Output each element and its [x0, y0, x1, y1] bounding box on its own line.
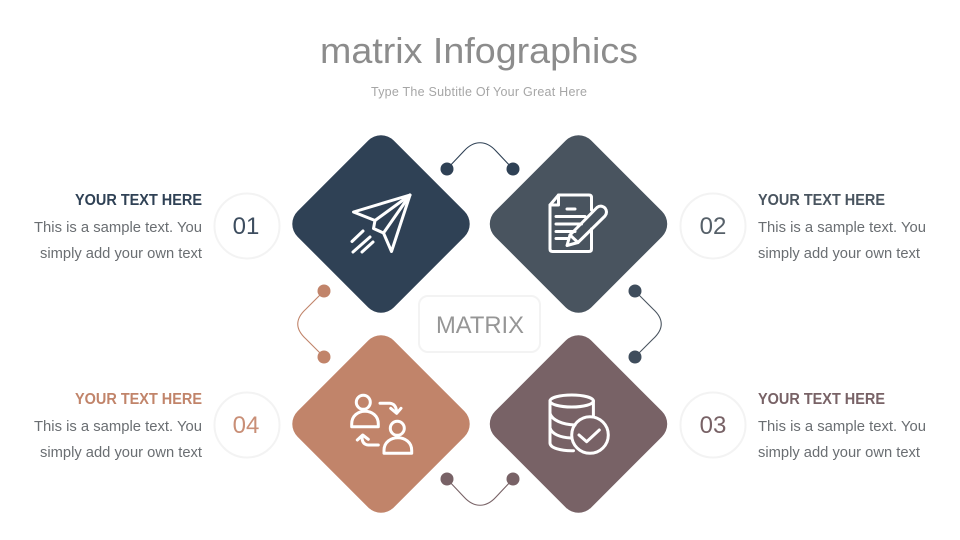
center label: MATRIX: MATRIX	[436, 312, 524, 339]
text block 01: simply add your own text	[40, 246, 202, 262]
icon: database with check	[550, 395, 608, 453]
title: matrix Infographics	[320, 30, 638, 71]
badge 04	[214, 392, 280, 458]
text block 04	[34, 391, 202, 461]
text block 02: This is a sample text. You	[758, 220, 926, 236]
connector: right	[628, 284, 661, 364]
diamond 04	[285, 328, 477, 520]
text block 04: This is a sample text. You	[34, 419, 202, 435]
badge 02: 02	[700, 213, 726, 240]
text block 03: This is a sample text. You	[758, 419, 926, 435]
diamond 03	[482, 328, 675, 520]
text block 04: simply add your own text	[40, 445, 202, 461]
text block 03	[758, 391, 926, 461]
text block 01	[34, 192, 202, 262]
badge 04: 04	[233, 412, 259, 439]
icon: paper plane	[352, 195, 410, 252]
connector: left	[298, 284, 330, 364]
connector: top	[440, 143, 520, 176]
badge 03	[680, 392, 746, 458]
icon: document and pencil	[550, 195, 606, 252]
badge 01	[214, 194, 280, 258]
icon: people exchange	[352, 395, 412, 453]
text block 01: YOUR TEXT HERE	[75, 192, 202, 209]
text block 03: simply add your own text	[758, 445, 920, 461]
diamond 01	[285, 128, 477, 320]
center label: MATRIX	[419, 296, 540, 352]
text block 01: This is a sample text. You	[34, 220, 202, 236]
text block 04: YOUR TEXT HERE	[75, 391, 202, 408]
connector: bottom	[440, 472, 520, 505]
text block 02: YOUR TEXT HERE	[758, 192, 885, 209]
text block 02: simply add your own text	[758, 246, 920, 262]
badge 02	[680, 194, 746, 258]
text block 03: YOUR TEXT HERE	[758, 391, 885, 408]
badge 03: 03	[700, 412, 726, 439]
text block 02	[758, 192, 926, 262]
badge 01: 01	[233, 213, 259, 240]
diamond 02	[482, 128, 675, 320]
subtitle: Type The Subtitle Of Your Great Here	[371, 85, 587, 99]
